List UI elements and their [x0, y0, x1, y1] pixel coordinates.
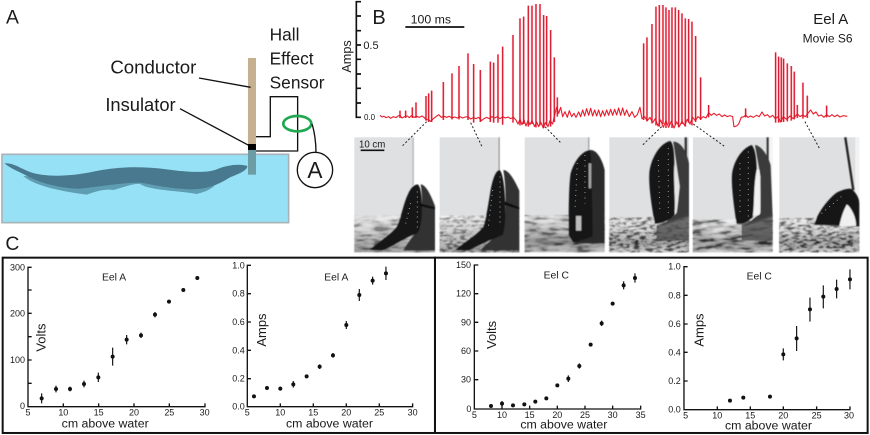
chart: Eel C amps: 1.0 [668, 262, 681, 272]
chart: Eel C amps: 0.2 [668, 376, 681, 386]
photo 5 [693, 137, 773, 252]
tick label 0.5: 0.5 [363, 40, 379, 52]
icon: eel [5, 163, 247, 195]
chart: Eel C volts: 20 [552, 410, 562, 420]
photo 3 [525, 137, 605, 252]
label: Movie S6: Movie S6 [803, 32, 853, 46]
chart: Eel A amps: 0.4 [232, 345, 245, 355]
conductor rod below water [248, 150, 256, 175]
chart: Eel C volts: 60 [461, 346, 471, 356]
chart: Eel C volts: 30 [608, 410, 618, 420]
label: Insulator: Insulator [105, 94, 176, 115]
chart: Eel C amps: 0.4 [668, 347, 681, 357]
chart: Eel C volts: 30 [461, 375, 471, 385]
chart: Eel C amps: cm above water [725, 418, 812, 432]
chart: Eel A volts: cm above water [62, 417, 149, 431]
label: Conductor: Conductor [110, 56, 196, 77]
insulator segment [248, 144, 256, 150]
chart: Eel A amps: cm above water [286, 417, 373, 431]
red current trace [380, 4, 847, 128]
chart: Eel C volts: 35 [636, 410, 646, 420]
chart: Eel C volts: 10 [497, 410, 507, 420]
chart: Eel A amps: 5 [245, 408, 250, 418]
label: Hall Effect Sensor: Hall [270, 25, 299, 45]
panel letter B: B [372, 7, 386, 29]
chart: Eel C amps: 25 [812, 410, 822, 420]
chart: Eel C amps [668, 262, 854, 432]
chart: Eel A amps: 1.0 [232, 260, 245, 270]
chart: Eel C volts: 25 [580, 410, 590, 420]
chart: Eel C amps: Eel C [747, 271, 772, 282]
chart: Eel A amps: 20 [341, 408, 351, 418]
scale bar: 100 ms: 100 ms [411, 13, 451, 27]
chart: Eel C amps: 15 [745, 410, 755, 420]
chart: Eel A volts: Volts [33, 323, 48, 352]
label: Hall Effect Sensor: Effect [270, 49, 314, 69]
chart: Eel A amps: 10 [275, 408, 285, 418]
scale bar: 100 ms [405, 13, 464, 27]
chart: Eel C amps: Amps [691, 313, 706, 347]
conductor rod [248, 58, 256, 144]
chart: Eel A volts: 25 [164, 407, 174, 417]
chart: Eel A amps: 0.0 [232, 402, 245, 412]
conductor pointer [199, 78, 251, 87]
chart: Eel A amps: 30 [408, 408, 418, 418]
label: Eel A: Eel A [813, 11, 848, 28]
chart: Eel A amps: Eel A [324, 272, 349, 283]
frame: Eel C [435, 258, 868, 433]
panel letter A: A [6, 7, 19, 28]
chart: Eel C amps: 0.0 [668, 405, 681, 415]
photo 4 [609, 137, 689, 252]
chart: Eel A amps: 0.6 [232, 317, 245, 327]
chart: Eel C amps: 5 [683, 410, 688, 420]
panel A: experimental setup [2, 7, 333, 223]
ammeter [297, 152, 333, 188]
chart: Eel A volts: 20 [129, 407, 139, 417]
chart: Eel C volts: 0 [466, 404, 471, 414]
chart: Eel C amps: 30 [844, 410, 854, 420]
frame: Eel A [3, 258, 435, 433]
Hall effect sensor ring [283, 116, 311, 131]
chart: Eel A amps: Amps [254, 313, 269, 347]
tick label 0.0: 0.0 [364, 113, 376, 122]
chart: Eel C volts: cm above water [520, 417, 607, 431]
chart: Eel A volts: 10 [58, 407, 68, 417]
chart: Eel C volts [456, 260, 646, 431]
ammeter: A [307, 157, 323, 183]
chart: Eel C volts: 120 [456, 289, 471, 299]
chart: Eel C amps: 0.8 [668, 290, 681, 300]
photo 6 [779, 137, 859, 252]
chart: Eel A amps: 25 [374, 408, 384, 418]
panel B: current trace [340, 2, 853, 128]
panel C: scatter plots [3, 234, 435, 433]
chart: Eel A volts: 100 [10, 355, 25, 365]
chart: Eel A volts: 30 [200, 407, 210, 417]
chart: Eel C volts: 90 [461, 317, 471, 327]
chart: Eel C volts: 15 [525, 410, 535, 420]
chart: Eel C amps: 0.6 [668, 319, 681, 329]
ammeter lead [312, 124, 316, 152]
photo 1 [354, 137, 435, 252]
scale bar: 10 cm: 10 cm [359, 139, 385, 150]
chart: Eel A volts: Eel A [102, 272, 126, 283]
chart: Eel C amps: 10 [712, 410, 722, 420]
label: Hall Effect Sensor: Sensor [270, 72, 325, 92]
sensor wire circuit [256, 97, 298, 151]
chart: Eel A amps: 0.8 [232, 289, 245, 299]
chart: Eel C volts: Eel C [544, 270, 569, 281]
panel B: video stills [354, 122, 859, 252]
y axis title: Amps [340, 40, 354, 73]
chart: Eel C amps: 20 [778, 410, 788, 420]
chart: Eel C volts: Volts [484, 320, 499, 349]
dotted connectors between trace and stills [402, 122, 820, 149]
photo 2 [440, 137, 519, 252]
chart: Eel A volts: 0 [20, 401, 25, 411]
chart: Eel A volts: 5 [25, 407, 30, 417]
y axis [356, 2, 361, 117]
chart: Eel C volts: 150 [456, 260, 471, 270]
chart: Eel A amps: 0.2 [232, 374, 245, 384]
chart: Eel A volts: 300 [10, 262, 25, 272]
panel letter C: C [5, 234, 19, 255]
chart: Eel A volts: 15 [94, 407, 104, 417]
chart: Eel A volts: 200 [10, 309, 25, 319]
chart: Eel A volts [10, 262, 210, 431]
chart: Eel A amps: 15 [308, 408, 318, 418]
water tank [2, 154, 289, 223]
chart: Eel A amps [232, 260, 418, 431]
chart: Eel C volts: 5 [472, 410, 477, 420]
insulator pointer [180, 109, 249, 145]
